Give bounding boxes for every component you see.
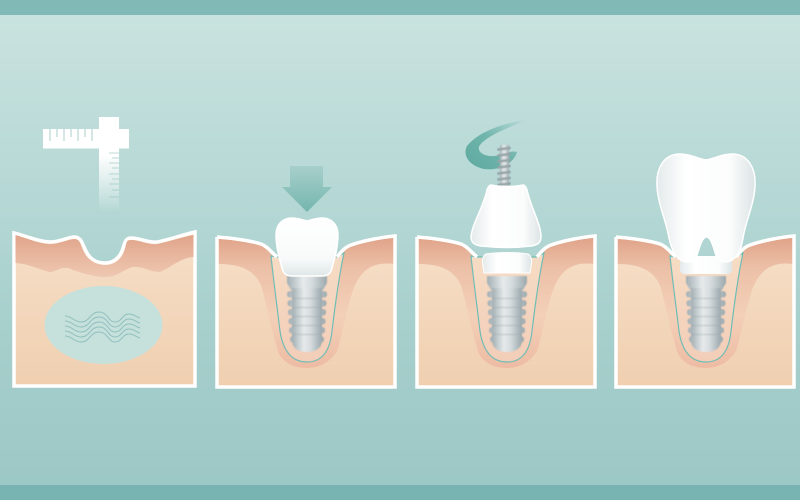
panel: finished tooth on implant — [616, 154, 794, 387]
crown — [276, 218, 338, 276]
gum and bone — [616, 236, 794, 387]
oval graft area — [44, 286, 162, 364]
molar tooth — [657, 154, 755, 262]
cap abutment — [471, 185, 541, 248]
panel: empty socket with bone graft — [14, 232, 195, 386]
panel: implant with crown — [217, 218, 395, 387]
top band — [0, 0, 800, 15]
bone block — [14, 232, 195, 386]
bottom band — [0, 485, 800, 500]
gum and bone — [217, 236, 395, 387]
wavy graft lines — [65, 312, 140, 342]
implant screw — [686, 276, 726, 352]
screw post — [498, 145, 510, 187]
healing cap on implant — [482, 252, 532, 273]
implant screw — [287, 276, 327, 352]
implant screw — [487, 276, 527, 352]
gum layer — [16, 235, 194, 277]
icon: downward arrow — [282, 166, 332, 212]
rotation swirl — [466, 120, 527, 169]
icon: measuring ruler — [43, 117, 129, 212]
abutment — [680, 256, 732, 274]
panel: abutment being screwed — [417, 120, 595, 387]
gum and bone — [417, 236, 595, 387]
